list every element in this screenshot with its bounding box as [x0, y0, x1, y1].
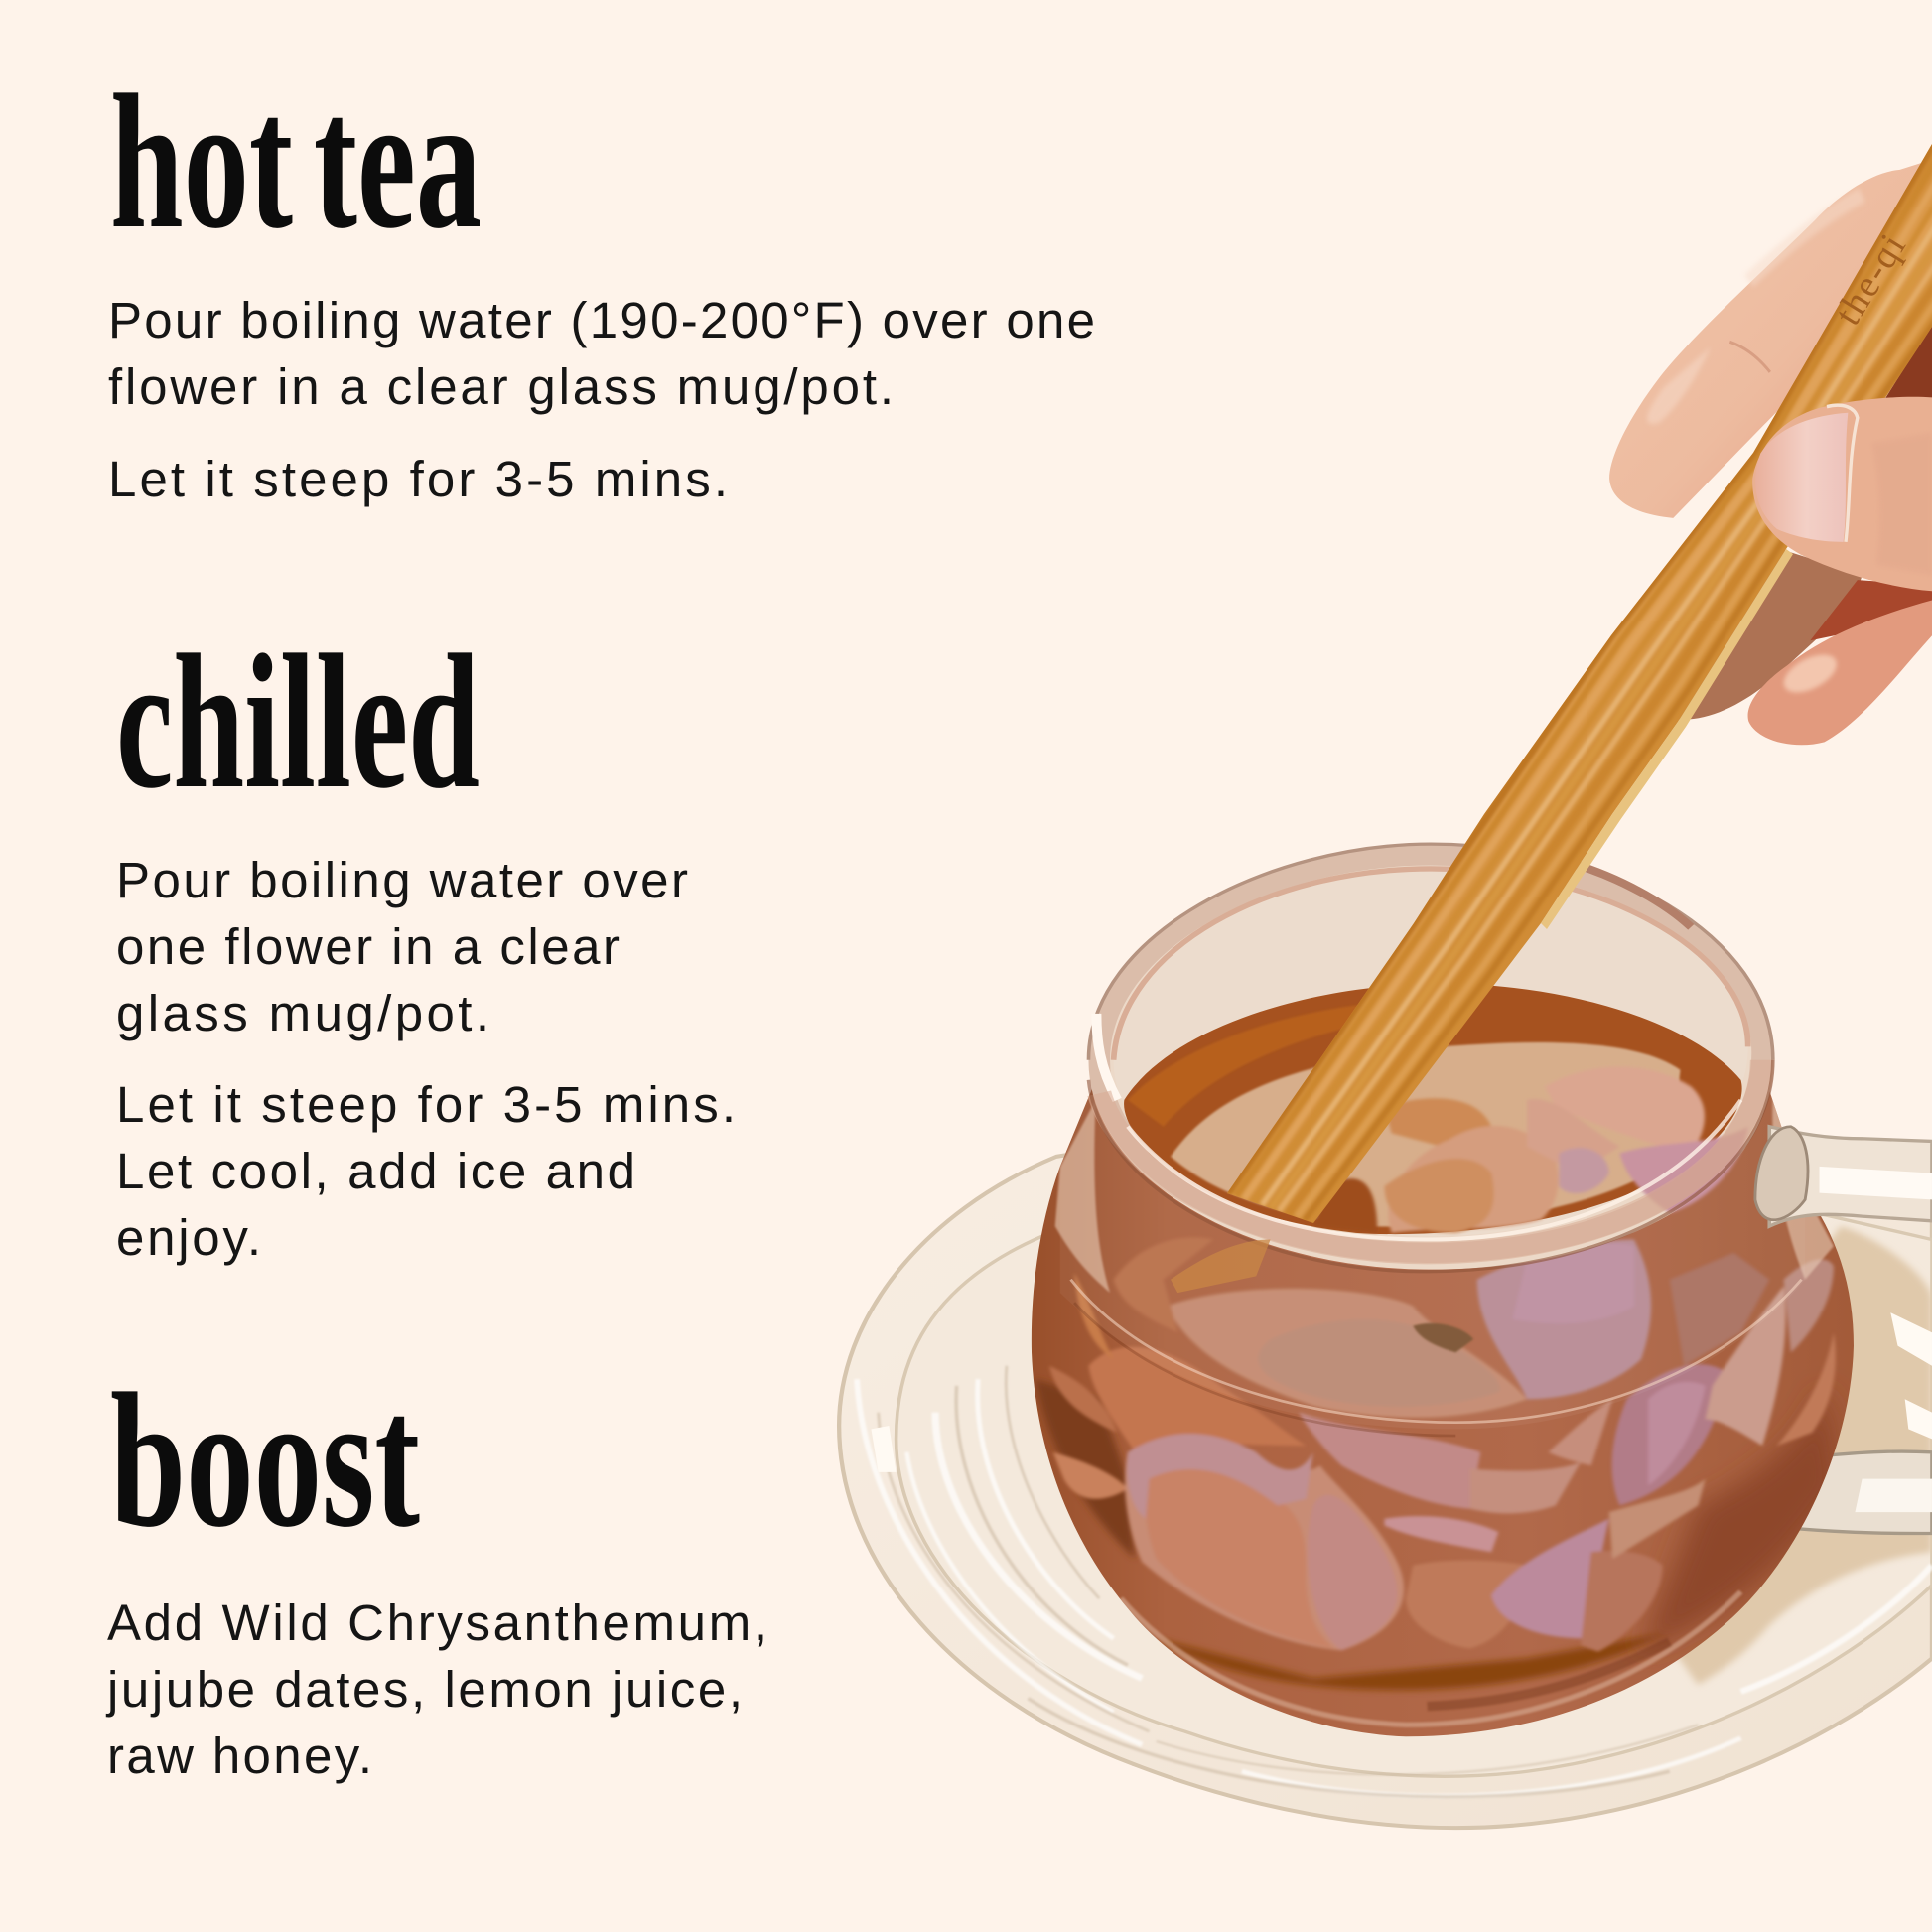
bamboo stick [1227, 144, 1932, 1223]
section: boost [105, 1353, 767, 1784]
index finger [1609, 160, 1932, 518]
mug body with steeped tea [1014, 1066, 1869, 1758]
lower mug handle [1798, 1451, 1932, 1534]
rim highlights [1088, 844, 1773, 1253]
boost instructions [105, 1594, 767, 1784]
chilled instructions: Let it steep for 3-5 mins. [116, 1076, 736, 1133]
big lower petal [1123, 1462, 1406, 1652]
heading: boost: boost [110, 1353, 420, 1567]
pale glass sides of neck [1055, 1100, 1110, 1293]
hot tea instructions [108, 292, 1095, 507]
section: hot tea [108, 55, 1095, 507]
chilled instructions: glass mug/pot. [116, 985, 489, 1041]
heading: chilled: chilled [116, 615, 480, 828]
chilled instructions [116, 852, 736, 1266]
saucer [839, 1080, 1932, 1828]
tea surface [1124, 984, 1742, 1234]
belly seam line [1071, 1280, 1802, 1423]
mug interior above tea [1088, 844, 1773, 1270]
hot tea instructions: Pour boiling water (190-200°F) over one [108, 292, 1095, 348]
hot tea instructions: Let it steep for 3-5 mins. [108, 451, 728, 507]
hot tea instructions: flower in a clear glass mug/pot. [108, 358, 894, 415]
chilled instructions: Let cool, add ice and [116, 1143, 635, 1199]
photo: hand stirring rose tea with bamboo stick [839, 144, 1932, 1828]
mauve petals [1477, 1240, 1651, 1399]
chilled instructions: one flower in a clear [116, 918, 620, 975]
bottom rim [1121, 1591, 1741, 1725]
boost instructions: jujube dates, lemon juice, [105, 1661, 743, 1718]
chilled instructions: enjoy. [116, 1209, 261, 1266]
engraved logo: the-qi [1827, 225, 1915, 333]
lower orange petals [1406, 1561, 1527, 1648]
boost instructions: Add Wild Chrysanthemum, [107, 1594, 767, 1651]
glass mug with tea and petals [1014, 844, 1932, 1758]
flower stem [1413, 1323, 1473, 1352]
hand holding the stick: thumb [1752, 397, 1932, 591]
mug front rim and upper handle over stick [1088, 1060, 1932, 1293]
cup shadow on saucer [1598, 1226, 1932, 1685]
boost instructions: raw honey. [107, 1727, 372, 1784]
neck glass tint [1060, 1080, 1805, 1429]
chilled instructions: Pour boiling water over [116, 852, 688, 908]
section: chilled [116, 615, 736, 1266]
petals in tea surface [1313, 1066, 1748, 1233]
heading: hot tea: hot tea [110, 55, 482, 268]
belly petals [1167, 1289, 1527, 1418]
hand holding the stick: back fingers [1609, 160, 1932, 745]
